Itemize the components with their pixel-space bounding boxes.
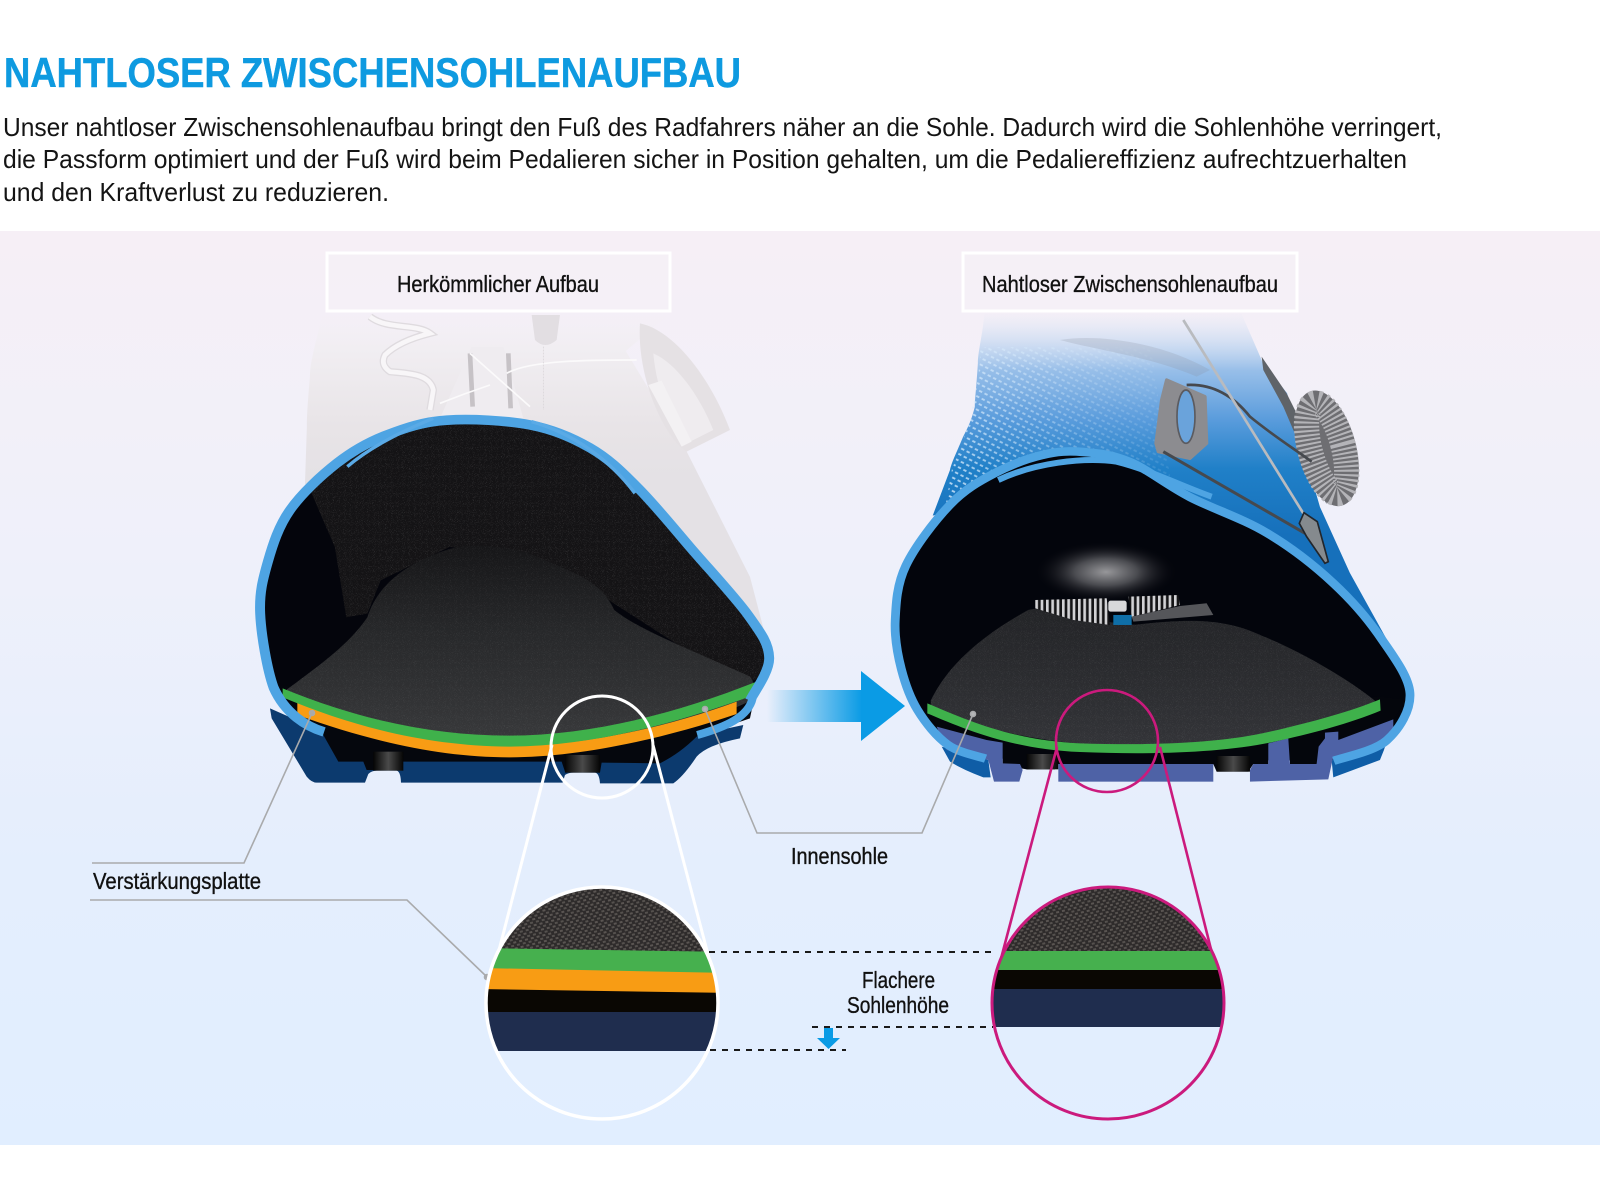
upper weave dots [946,347,1170,503]
sole: slate blue [930,697,1407,782]
arrow: height reduction [817,1028,840,1049]
upper shadow patch [1060,338,1210,377]
label: conventional: Herkömmlicher Aufbau [397,271,599,297]
leader lines: reinforcement plate [90,710,490,980]
detail circle: seamless [985,880,1235,1119]
intro text: und den Kraftverlust zu reduzieren. [3,177,389,207]
shell: blue cut edge [895,451,1410,761]
conventional shoe cross-section [260,312,769,783]
label: seamless: Nahtloser Zwischensohlenaufbau [982,271,1278,297]
dial base [1262,357,1327,504]
lining: textured black [310,420,769,682]
label: lower sole height: Sohlenhöhe [847,992,949,1018]
insole: grey fabric [287,546,755,749]
heel glow [1036,542,1176,602]
label: insole: Innensohle [791,843,888,869]
cable guide [1299,513,1328,563]
seamless shoe cross-section [895,312,1410,782]
shell interior: black [260,420,769,732]
overlap strip [998,460,1212,497]
magnifier lines: white [490,696,716,985]
shoe upper: blue [933,312,1403,684]
magnifier lines: magenta [994,690,1220,985]
arrow: comparison [767,671,905,741]
hardware: strip, buckle, dial, cables [998,320,1370,563]
shell interior: black [895,451,1410,761]
dashed guide lines [709,952,997,1050]
leader lines: insole [702,706,976,833]
cables [1163,320,1312,533]
label: conventional [327,253,670,311]
label: reinforcement plate: Verstärkungsplatte [93,868,261,894]
reinforcement plate: orange [297,702,737,757]
label: lower sole height [847,967,949,1018]
detail circle: conventional [480,880,730,1119]
panel: gradient background [0,231,1600,1145]
title: NAHTLOSER ZWISCHENSOHLENAUFBAU [4,49,741,96]
label: seamless [963,253,1297,311]
shell: blue cut edge [260,420,769,732]
heel label [1035,595,1213,625]
insole: grey fabric [931,609,1375,747]
intro text [3,112,1442,207]
shoe upper: white silhouette [305,312,765,636]
intro text: Unser nahtloser Zwischensohlenaufbau bringt den Fuß des Radfahrers näher an die Sohle. Dadurch wird die Sohlenhöhe verringert, [3,112,1442,142]
buckle [1156,380,1207,458]
dial [1283,383,1370,513]
insole edge: green [927,699,1381,753]
shoe upper details: laces, tongue, dial [370,315,730,452]
intro text: die Passform optimiert und der Fuß wird beim Pedalieren sicher in Position gehalten, um die Pedaliereffizienz aufrechtzuerhalten [3,144,1407,174]
sole: navy [270,687,757,783]
insole edge: green [283,682,757,747]
shell tail and overlap strips [347,418,753,735]
label: lower sole height: Flachere [862,967,935,993]
